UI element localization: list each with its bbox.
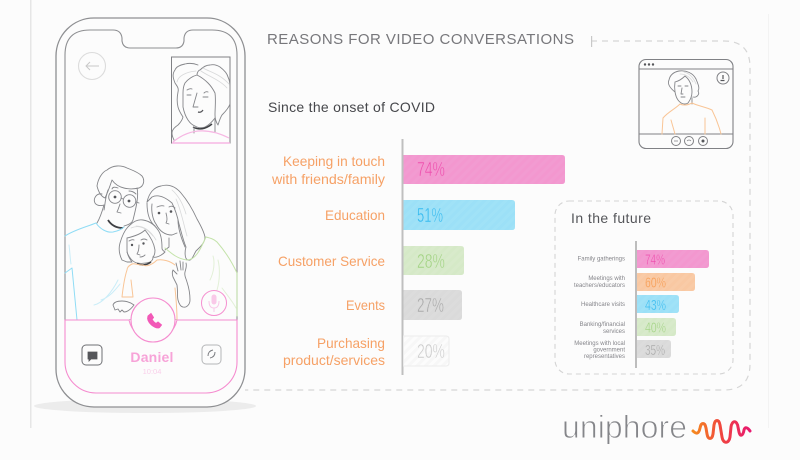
- call button: [131, 298, 175, 342]
- microphone button: [202, 290, 226, 316]
- back button icon: [78, 52, 106, 80]
- category labels: Education: [325, 207, 385, 223]
- child: [113, 220, 190, 320]
- phone shadow: [34, 399, 256, 413]
- man: [65, 166, 144, 320]
- bar: banking: 40%: [645, 320, 666, 336]
- bar: teachers: Meetings with: [588, 276, 625, 282]
- phone screen outline with notch: [65, 30, 237, 320]
- category labels: [271, 153, 385, 368]
- bar: 51%: 51%: [417, 205, 443, 227]
- bar: 27%: 27%: [417, 295, 444, 317]
- category labels: Customer Service: [278, 253, 385, 269]
- category labels: Purchasing: [317, 335, 385, 351]
- chat icon: [82, 345, 102, 365]
- bar chart: since the onset of COVID: [271, 139, 565, 375]
- panel: in the future: [555, 201, 733, 374]
- category labels: Events: [346, 297, 385, 313]
- category labels: product/services: [283, 352, 385, 368]
- bar: 74%: 74%: [417, 159, 445, 181]
- logo: uniphore: uniphore: [562, 409, 687, 445]
- bar: banking: Banking/financial: [580, 322, 625, 328]
- subheading: Since the onset of COVID: [268, 99, 435, 115]
- bar: teachers: teachers/educators: [574, 283, 625, 289]
- logo: uniphore: [562, 409, 750, 445]
- bar: local government: 35%: [645, 342, 665, 359]
- bar: family gatherings: Family gatherings: [578, 256, 625, 262]
- bar: 28%: [404, 246, 464, 275]
- bar: 28%: 28%: [417, 251, 445, 273]
- category labels: Keeping in touch: [283, 153, 385, 169]
- bar: 51%: [404, 200, 515, 230]
- bar: 20%: 20%: [417, 341, 445, 363]
- phone body: [56, 18, 245, 407]
- lower hand: [113, 301, 134, 312]
- bar: teachers: 60%: [645, 274, 666, 292]
- panel heading: In the future: [571, 210, 651, 226]
- bar: teachers: [574, 273, 695, 292]
- title: REASONS FOR VIDEO CONVERSATIONS: [267, 31, 574, 48]
- bar: 27%: [404, 290, 462, 320]
- bar: family gatherings: [578, 250, 709, 268]
- call time: 10:04: [143, 367, 161, 376]
- bar: banking: [580, 318, 676, 336]
- video window illustration: [639, 60, 733, 148]
- woman: [147, 185, 237, 316]
- small caller video: woman: [172, 57, 230, 143]
- bar: local government: government: [593, 348, 625, 354]
- bar: local government: [574, 340, 671, 360]
- bar: local government: representatives: [584, 354, 625, 360]
- bar: local government: Meetings with local: [574, 341, 625, 347]
- bottom call panel: [65, 298, 237, 393]
- bar: 74%: [404, 155, 565, 184]
- bar: healthcare: [581, 295, 679, 314]
- switch camera icon: [202, 345, 221, 364]
- phone mockup: [56, 18, 245, 407]
- raised hand: [172, 261, 190, 307]
- bar: healthcare: 43%: [645, 297, 666, 314]
- bar: 20%: [404, 336, 449, 366]
- category labels: with friends/family: [271, 171, 385, 187]
- bar: family gatherings: 74%: [645, 252, 665, 268]
- bar: healthcare: Healthcare visits: [581, 302, 625, 308]
- bar chart: in the future: [574, 241, 709, 368]
- caller name: Daniel: [130, 349, 174, 365]
- bar: banking: services: [603, 329, 625, 335]
- family illustration: [65, 166, 237, 320]
